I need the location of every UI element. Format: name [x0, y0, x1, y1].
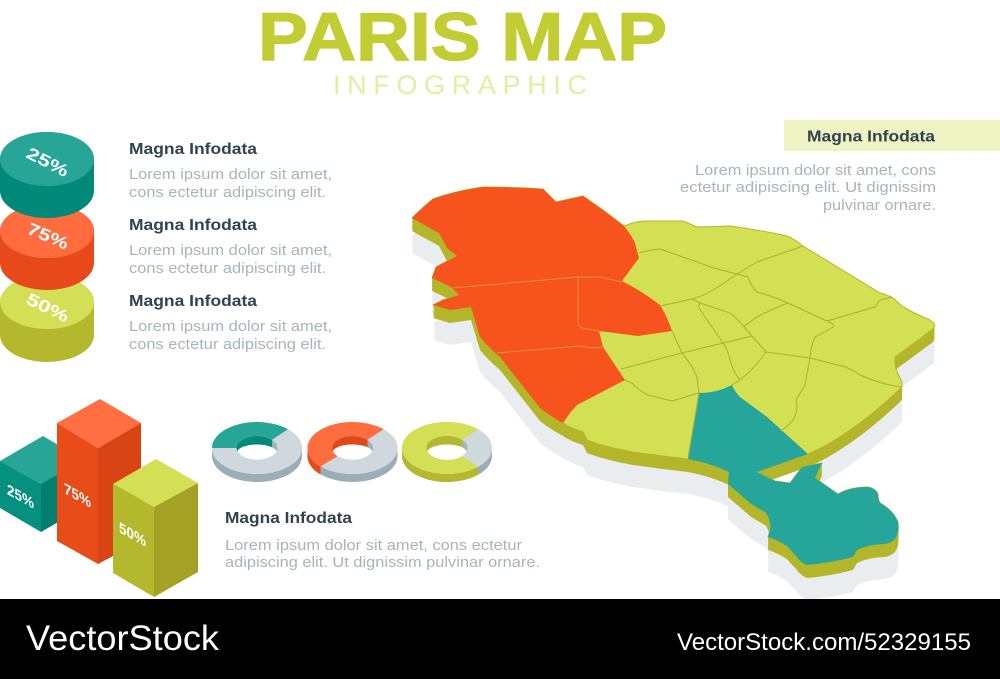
- bar: 75%: 75%: [64, 480, 91, 512]
- cylinder: 75%: [0, 204, 94, 290]
- bar: 75%: [57, 399, 141, 564]
- text block: item 3: [129, 293, 332, 353]
- cylinder: 25%: [0, 132, 94, 218]
- text block: item 2: Lorem ipsum dolor sit amet,: [129, 243, 332, 259]
- orange district borders: [452, 277, 622, 353]
- bar: 25%: [0, 436, 85, 532]
- footer url: VectorStock.com/52329155: [677, 629, 971, 656]
- bar: 25%: 25%: [7, 481, 34, 513]
- subtitle: INFOGRAPHIC: [333, 70, 587, 100]
- text block: item 2: [129, 217, 332, 277]
- donut: 50% green: [402, 422, 492, 482]
- donut: 75% orange: [307, 422, 398, 482]
- text block: donut caption: adipiscing elit. Ut dignissim pulvinar ornare.: [225, 555, 540, 571]
- footer band: [0, 599, 1000, 679]
- isometric bar chart: [0, 399, 198, 597]
- isometric cylinder stack: [0, 132, 94, 362]
- map: isometric Paris: [380, 170, 934, 580]
- text block: item 1: cons ectetur adipiscing elit.: [129, 185, 326, 201]
- text block: donut caption: Lorem ipsum dolor sit amet, cons ectetur: [225, 538, 522, 554]
- callout: body text: ectetur adipiscing elit. Ut dignissim: [680, 180, 936, 196]
- cylinder: 25%: 25%: [23, 144, 72, 181]
- text block: item 2: Magna Infodata: [129, 217, 257, 234]
- map region: orange west: [412, 187, 672, 423]
- callout: body text: [680, 163, 936, 214]
- callout: header bar: Magna Infodata: [807, 128, 935, 146]
- map: drop shadow: [412, 205, 934, 600]
- cylinder: 50%: [0, 275, 94, 362]
- text block: donut caption: [225, 510, 540, 571]
- map top face: green districts: [412, 187, 934, 565]
- cylinder: 75%: 75%: [24, 219, 71, 253]
- text block: donut caption: Magna Infodata: [225, 510, 352, 527]
- text block: item 3: Magna Infodata: [129, 293, 257, 310]
- text block: item 1: Lorem ipsum dolor sit amet,: [129, 167, 332, 183]
- cylinder: 50%: 50%: [23, 290, 72, 326]
- text block: item 3: cons ectetur adipiscing elit.: [129, 337, 326, 353]
- district borders: [621, 246, 901, 458]
- bar: 50%: [113, 459, 198, 597]
- map side wall: [412, 188, 934, 578]
- callout: body text: pulvinar ornare.: [823, 198, 936, 214]
- donut: 25% teal: [212, 422, 302, 482]
- text block: item 3: Lorem ipsum dolor sit amet,: [129, 319, 332, 335]
- bar: 50%: 50%: [119, 519, 146, 551]
- text block: item 1: Magna Infodata: [129, 141, 257, 158]
- callout: body text: Lorem ipsum dolor sit amet, cons: [695, 163, 936, 179]
- donut charts: [212, 422, 492, 482]
- footer logo: VectorStock: [26, 619, 220, 658]
- callout: header bar: [784, 120, 1000, 151]
- text block: item 2: cons ectetur adipiscing elit.: [129, 261, 326, 277]
- title: PARIS MAP: [258, 0, 667, 75]
- map region: teal south: [688, 385, 898, 565]
- text block: item 1: [129, 141, 332, 201]
